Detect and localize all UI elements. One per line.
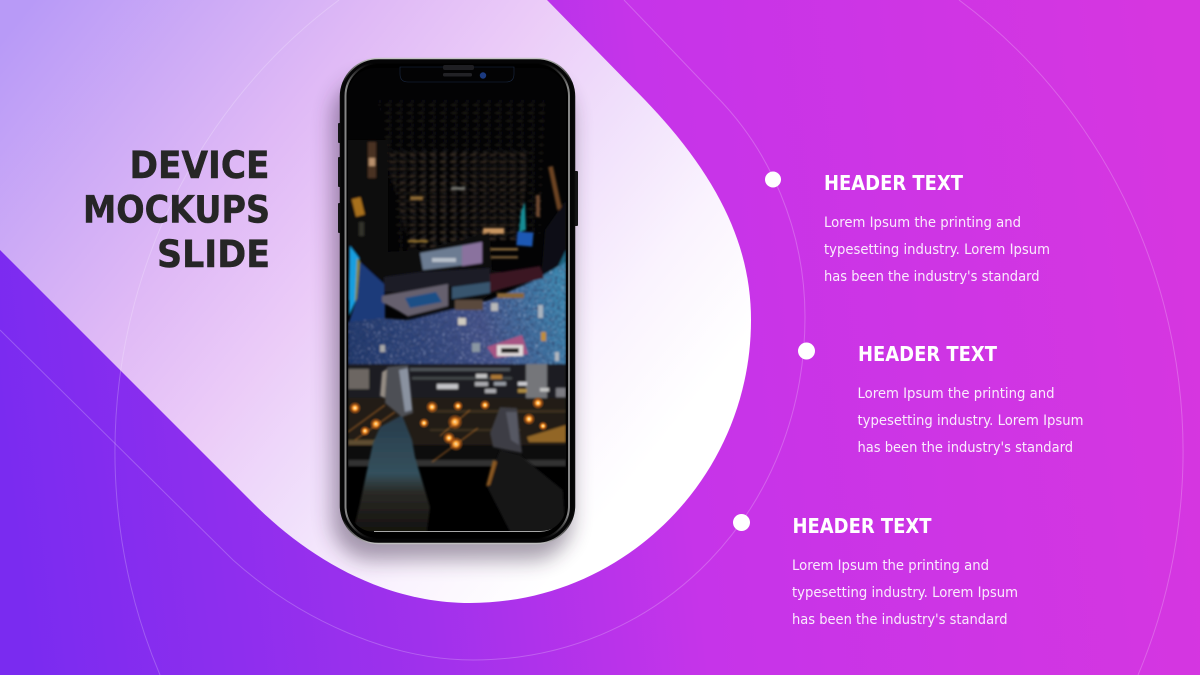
dark parapet <box>348 445 566 461</box>
item 2 body text <box>858 386 1084 456</box>
item 2 body text: Lorem Ipsum the printing and <box>858 386 1054 402</box>
left cyan sign strip <box>349 246 359 316</box>
item 2 <box>798 342 1084 456</box>
item 3 <box>733 514 1018 628</box>
title <box>83 144 270 276</box>
notch with speaker and camera <box>400 65 514 82</box>
legs and shoes <box>353 365 566 532</box>
item 3 body text: typesetting industry. Lorem Ipsum <box>792 585 1018 601</box>
white blob shape <box>0 0 751 603</box>
outline of blob offset <box>0 0 805 660</box>
item 2 body text: typesetting industry. Lorem Ipsum <box>858 413 1084 429</box>
dot 1 <box>765 172 781 188</box>
billboard and front of building <box>383 231 501 319</box>
item 1 body text: Lorem Ipsum the printing and <box>824 215 1021 231</box>
item 3 body text <box>792 558 1018 628</box>
item 2 body text: has been the industry's standard <box>858 440 1073 456</box>
item 1 <box>765 171 1050 285</box>
phone body <box>340 58 574 544</box>
item 3 body text: Lorem Ipsum the printing and <box>792 558 989 574</box>
item 3 body text: has been the industry's standard <box>792 612 1008 628</box>
item 1 body text <box>824 215 1050 285</box>
phone mockup <box>332 58 578 560</box>
crowd square <box>348 255 566 367</box>
item 3 header: HEADER TEXT <box>792 514 932 538</box>
street level <box>348 362 566 399</box>
phone shadow <box>332 78 572 560</box>
title: MOCKUPS <box>83 188 270 232</box>
side buttons <box>338 123 578 233</box>
screen photo: city from above <box>348 68 566 532</box>
item 1 body text: has been the industry's standard <box>824 269 1040 285</box>
screen edge highlight <box>374 528 552 532</box>
inner metal rim <box>346 63 569 539</box>
item 2 header: HEADER TEXT <box>858 342 997 366</box>
title: DEVICE <box>130 144 270 187</box>
item 1 body text: typesetting industry. Lorem Ipsum <box>824 242 1050 258</box>
city lights <box>348 396 548 462</box>
item 1 header: HEADER TEXT <box>824 171 963 195</box>
lower rooftop with lights <box>348 398 566 448</box>
dot 3 <box>733 514 750 531</box>
dot 2 <box>798 342 815 360</box>
title: SLIDE <box>157 233 270 276</box>
